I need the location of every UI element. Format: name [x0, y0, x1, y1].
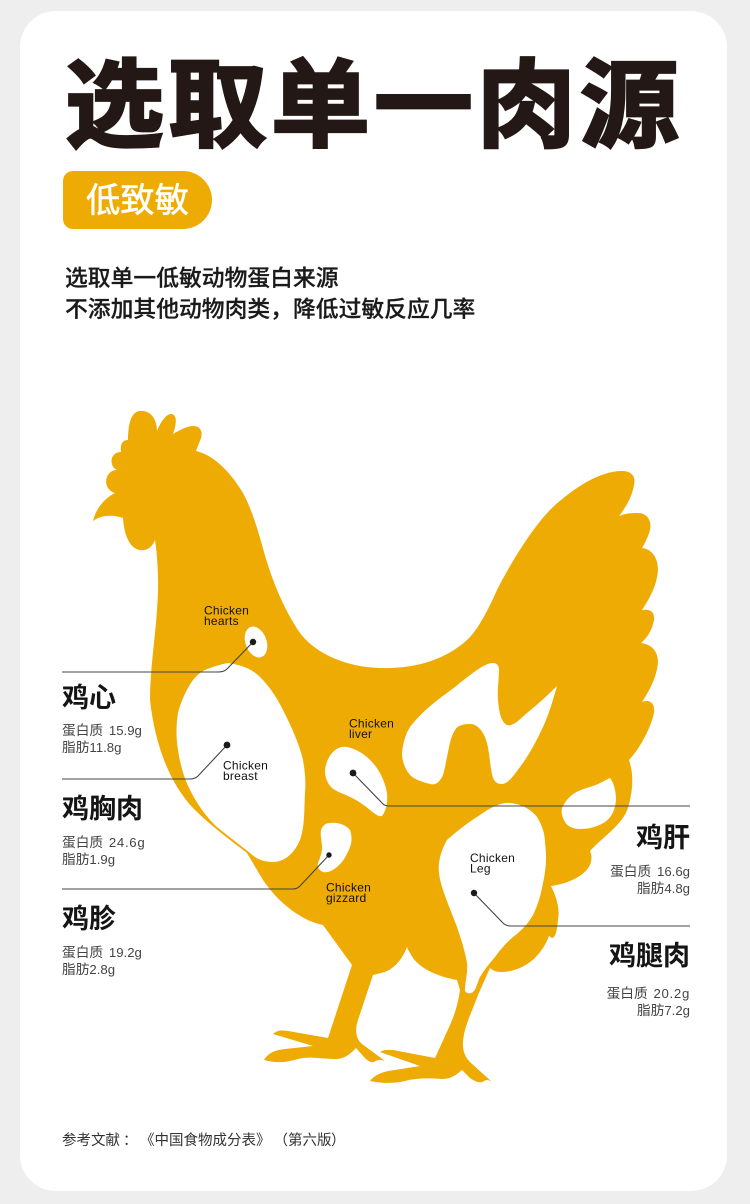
label: chicken liver: Chicken	[349, 716, 394, 730]
leader: gizzard	[62, 855, 329, 889]
data: chicken breast: 脂肪1.9g	[62, 852, 115, 867]
footnote: reference: （第六版	[274, 1129, 332, 1150]
dot: heart	[250, 639, 256, 645]
data: chicken breast: 蛋白质 24.6g	[62, 835, 145, 850]
leader: heart	[62, 642, 253, 672]
data: chicken leg: 脂肪7.2g	[637, 1003, 690, 1018]
data: chicken leg: 鸡腿肉	[609, 934, 690, 973]
leader lines and dots	[62, 639, 690, 926]
cutout: heart	[241, 623, 271, 661]
cutout: wing	[402, 663, 557, 784]
data: chicken gizzard: 蛋白质 19.2g	[62, 945, 142, 960]
label: chicken gizzard: Chicken	[326, 880, 371, 894]
data: chicken breast	[62, 787, 145, 867]
data: chicken heart	[62, 676, 142, 755]
data: chicken liver	[610, 816, 690, 896]
data: chicken liver: 鸡肝	[636, 816, 690, 855]
data: chicken heart: 鸡心	[62, 676, 116, 715]
data: chicken gizzard: 脂肪2.8g	[62, 962, 115, 977]
data: chicken liver: 脂肪4.8g	[637, 881, 690, 896]
leader: breast	[62, 745, 227, 779]
leader: leg	[474, 893, 690, 926]
dot: liver	[350, 770, 356, 776]
labels on chicken	[204, 603, 515, 905]
label: chicken hearts: Chicken	[204, 603, 249, 617]
title: 选取单一肉源	[65, 29, 683, 168]
label: chicken breast: breast	[223, 769, 258, 783]
data: chicken heart: 脂肪11.8g	[62, 740, 121, 755]
description text: 不添加其他动物肉类，降低过敏反应几率	[65, 291, 475, 324]
footnote: reference: ）	[331, 1129, 346, 1150]
footnote: reference: 参考文献	[62, 1129, 120, 1150]
cutout: breast	[176, 663, 305, 862]
data: chicken leg: 蛋白质 20.2g	[607, 986, 690, 1001]
leader: liver	[353, 773, 690, 806]
data: chicken heart: 蛋白质 15.9g	[62, 723, 142, 738]
label: chicken leg: Leg	[470, 862, 491, 876]
data: chicken gizzard: 鸡胗	[62, 897, 116, 936]
label: chicken hearts: hearts	[204, 614, 239, 628]
description text: 选取单一低敏动物蛋白来源	[65, 260, 339, 293]
label: chicken liver: liver	[349, 727, 372, 741]
badge: low allergy	[63, 171, 212, 229]
cutout: leg	[439, 803, 546, 993]
footnote: reference: ：	[123, 1129, 138, 1150]
data: chicken liver: 蛋白质 16.6g	[610, 864, 690, 879]
label: chicken breast: Chicken	[223, 758, 268, 772]
dot: leg	[471, 890, 477, 896]
cutout: tail	[562, 778, 616, 829]
dot: gizzard	[326, 852, 332, 858]
cutout: gizzard	[318, 823, 352, 872]
badge: low allergy: 低致敏	[86, 172, 189, 222]
chicken illustration	[62, 411, 690, 1083]
description text	[65, 260, 475, 324]
footnote: reference: 《中国食物成分表》	[140, 1129, 270, 1150]
label: chicken gizzard: gizzard	[326, 891, 366, 905]
data: chicken leg	[607, 934, 690, 1018]
label: chicken leg: Chicken	[470, 851, 515, 865]
dot: breast	[224, 742, 230, 748]
chicken silhouette	[93, 411, 658, 1083]
data: chicken gizzard	[62, 897, 142, 977]
cutout: liver	[325, 747, 387, 816]
data: chicken breast: 鸡胸肉	[62, 787, 143, 826]
